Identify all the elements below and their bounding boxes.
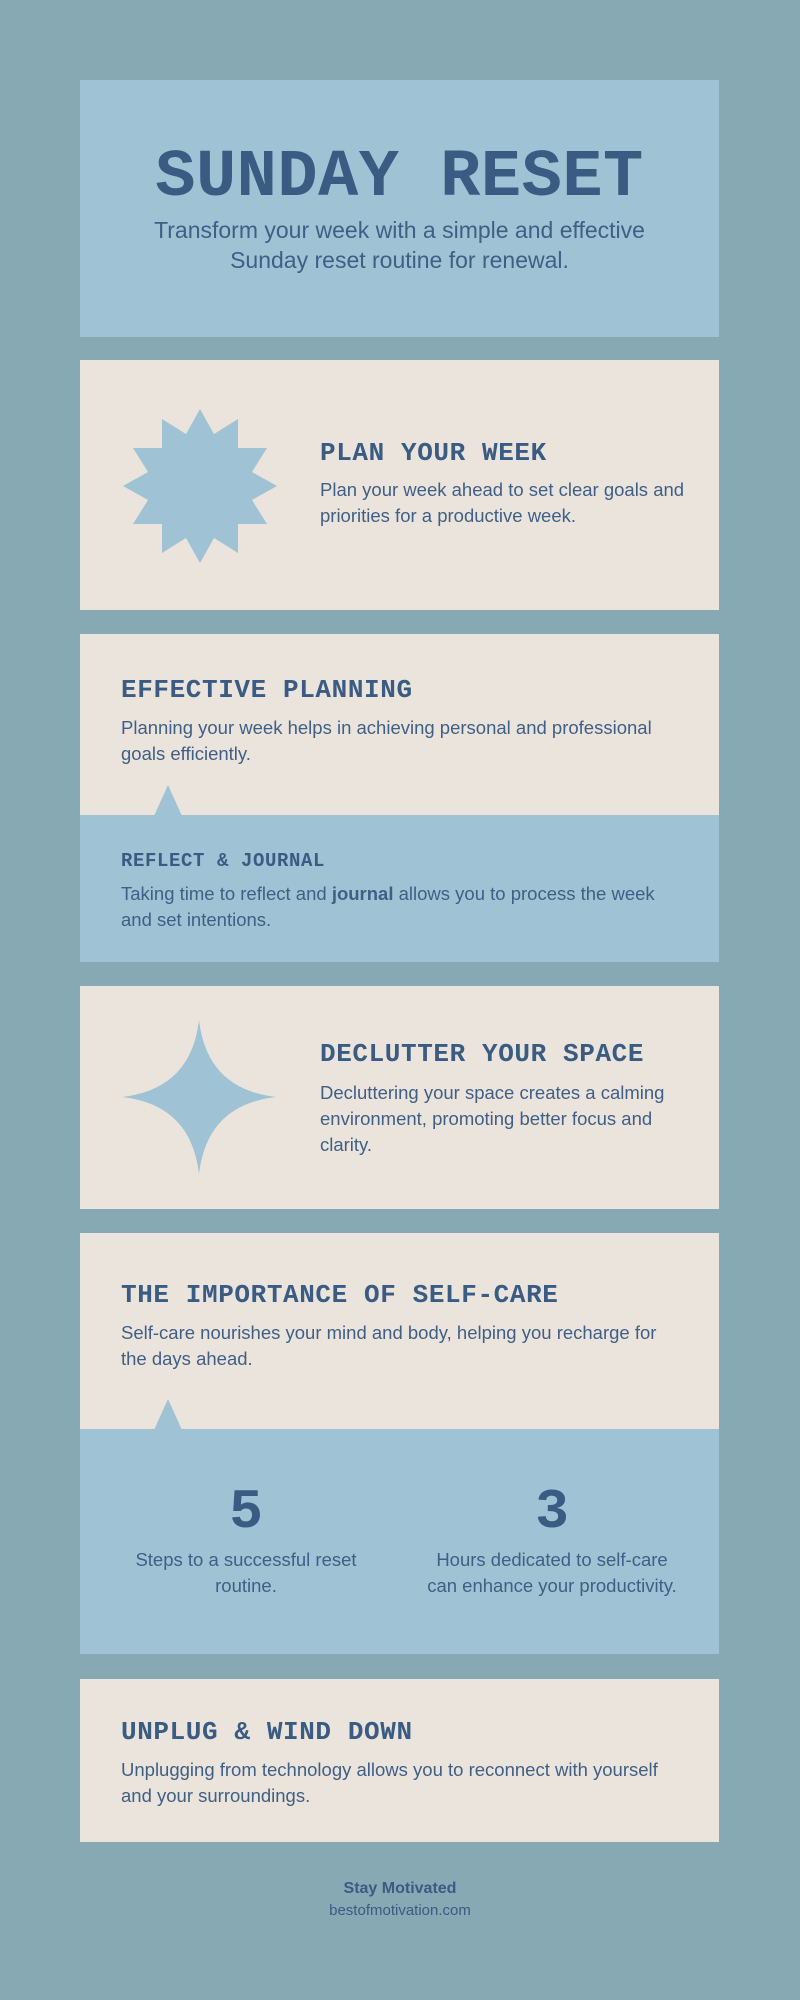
text: Unplugging from technology allows you to reconnect with yourself and your surroundings. (121, 1759, 658, 1806)
text: Taking time to reflect and journal allows you to process the week and set intentions. (121, 883, 655, 930)
icon: four-point star (122, 1020, 276, 1174)
footer (329, 1880, 471, 1919)
panel: reflect & journal (80, 815, 719, 962)
icon: starburst (123, 409, 277, 563)
stat: 5: 5 (229, 1480, 263, 1544)
stat: 5: routine. (215, 1575, 277, 1596)
text: Self-care nourishes your mind and body, helping you recharge for the days ahead. (121, 1322, 656, 1369)
subtitle (154, 217, 645, 273)
pointer (154, 785, 182, 815)
text: Planning your week helps in achieving personal and professional goals efficiently. (121, 717, 652, 764)
stat: 3: 3 (535, 1480, 569, 1544)
stat: 5 (135, 1480, 357, 1596)
subtitle: Transform your week with a simple and effective (154, 217, 645, 243)
panel: stats (80, 1429, 719, 1654)
panel: effective planning (80, 634, 719, 815)
header panel (80, 80, 719, 337)
stat: 3: can enhance your productivity. (427, 1575, 677, 1596)
footer: Stay Motivated (344, 1880, 456, 1897)
heading: THE IMPORTANCE OF SELF-CARE (121, 1280, 558, 1310)
heading: REFLECT & JOURNAL (121, 850, 325, 872)
text: Decluttering your space creates a calming environment, promoting better focus and clarity. (320, 1082, 664, 1155)
text: Plan your week ahead to set clear goals and priorities for a productive week. (320, 479, 684, 526)
panel: declutter (80, 986, 719, 1209)
stat: 5: Steps to a successful reset (135, 1549, 357, 1570)
subtitle: Sunday reset routine for renewal. (230, 247, 569, 273)
heading: EFFECTIVE PLANNING (121, 675, 413, 705)
footer: bestofmotivation.com (329, 1902, 471, 1919)
stat: 3 (427, 1480, 677, 1596)
panel: self-care (80, 1233, 719, 1429)
title: SUNDAY RESET (155, 140, 644, 216)
panel: plan your week (80, 360, 719, 610)
panel: unplug (80, 1679, 719, 1842)
stat: 3: Hours dedicated to self-care (436, 1549, 668, 1570)
heading: DECLUTTER YOUR SPACE (320, 1039, 644, 1069)
heading: UNPLUG & WIND DOWN (121, 1717, 413, 1747)
pointer (154, 1399, 182, 1429)
heading: PLAN YOUR WEEK (320, 438, 547, 468)
